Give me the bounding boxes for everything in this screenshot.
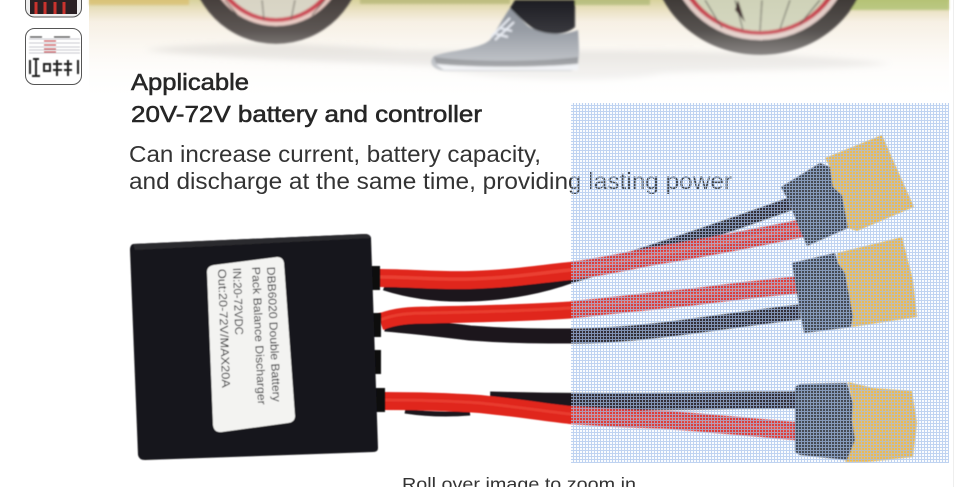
description line 2: and discharge at the same time, providing lasting power [129,168,732,194]
ground shadow [145,44,890,80]
module terminals [368,266,385,412]
right wheel [652,0,868,55]
black wire 3 lower strand [405,411,470,414]
discharger module [130,234,385,460]
red wire 2 [380,285,797,322]
left wheel [189,0,363,44]
background photo: bicycle wheels and shoe fading to white [89,0,949,102]
red wire 1 [378,228,803,280]
connector 1 [781,135,914,246]
label text: DBB6020 Double Battery [264,267,282,402]
description line 1: Can increase current, battery capacity, [129,141,541,167]
heading: voltage range: 20V-72V battery and controller [131,101,482,127]
label text: Out:20-72V/MAX20A [215,269,231,388]
thumbnail: wiring table [26,28,82,84]
module body [130,234,378,460]
thumbnail: product photo [26,0,82,17]
red wire 3 [383,401,806,432]
blue dotted selection overlay [571,103,949,463]
connector 3 [795,382,917,462]
fade to white [89,0,949,102]
thumbnail column [26,0,82,84]
label text: IN:20-72VDC [230,268,244,335]
shoe and trouser leg [431,0,579,71]
black wire 1 [385,204,790,295]
label text [215,267,282,405]
black wire 2 [385,312,800,336]
black wire 3 [490,400,800,402]
cables [378,204,806,432]
connector 2 [792,237,917,333]
label text: Pack Balance Discharger [249,267,267,405]
white label [207,257,295,432]
heading: Applicable: Applicable [131,69,249,95]
